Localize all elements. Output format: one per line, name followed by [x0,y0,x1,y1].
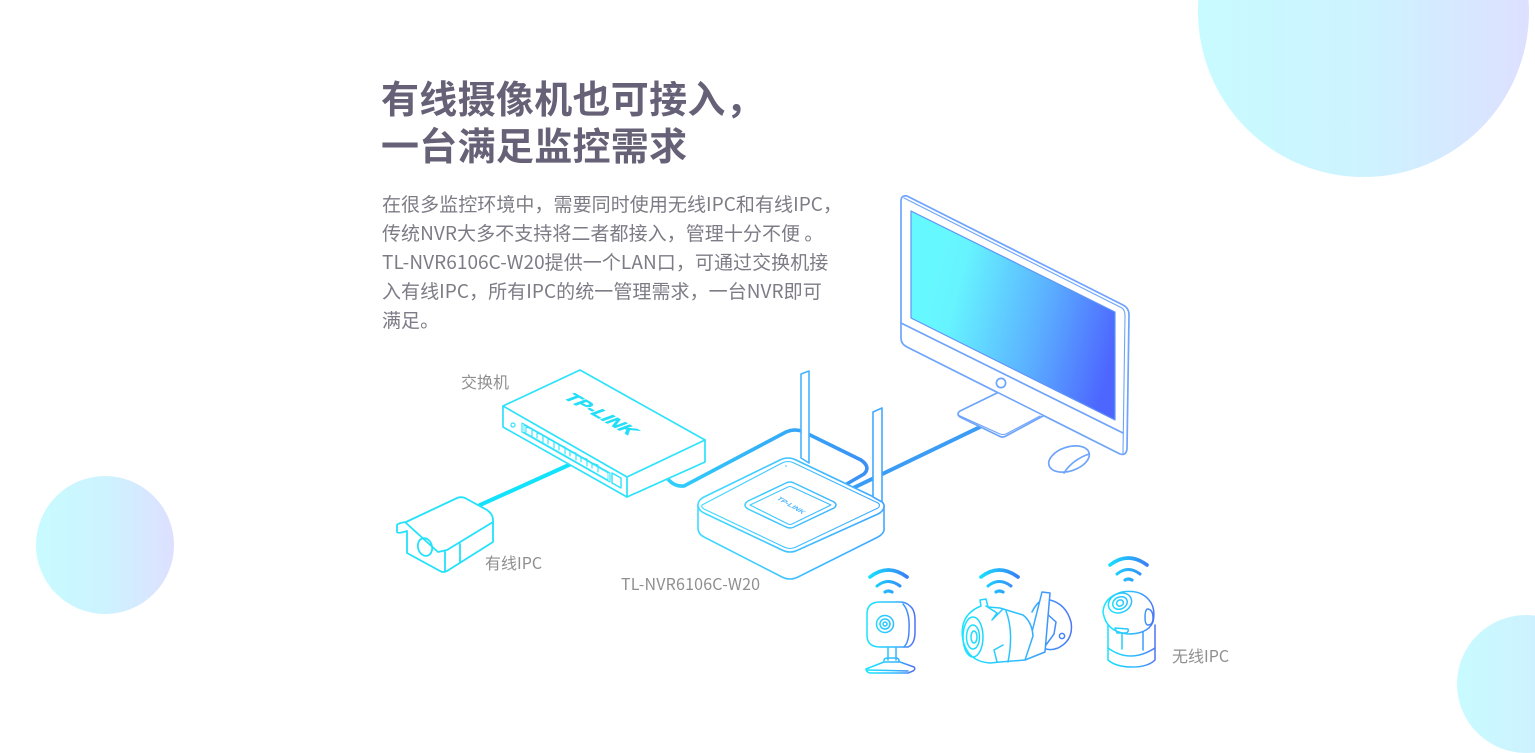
camera lens [416,536,434,558]
lens [876,616,894,632]
body text: 入有线IPC，所有IPC的统一管理需求，一台NVR即可 [382,277,822,304]
NVR logo: TP-LINK [774,497,806,515]
icon: indoor camera [866,602,915,673]
body text: TL-NVR6106C-W20提供一个LAN口，可通过交换机接 [382,248,828,275]
NVR antenna front [873,408,882,502]
switch logo: TP-LINK [560,391,644,439]
NVR inner panel [745,482,836,528]
title [381,69,764,171]
NVR antenna rear [801,371,809,463]
icon: bullet camera [962,592,1071,663]
body text: 传统NVR大多不支持将二者都接入，管理十分不便 。 [382,219,823,246]
label: switch: 交换机 [461,369,509,393]
icon: NVR [698,371,884,579]
background circle: bottom right [1457,615,1535,753]
background circle: top right [1198,0,1529,177]
monitor button [996,378,1006,388]
body text [382,190,842,333]
icon: monitor [901,196,1129,477]
label: NVR model: TL-NVR6106C-W20 [621,571,760,595]
icon: wifi signal 3 [1110,558,1147,580]
background circle: left [36,476,174,614]
cable: switch to NVR [667,430,867,486]
switch ports [522,423,621,488]
stand [884,648,899,663]
label: wired IPC: 有线IPC [485,550,542,574]
body [962,599,1033,663]
body text: 在很多监控环境中，需要同时使用无线IPC和有线IPC， [382,190,842,217]
label: wireless IPC: 无线IPC [1172,643,1229,667]
lens [1105,589,1135,617]
cable: camera to switch [480,464,571,505]
icon: switch [503,370,705,497]
icon: dome camera [1103,589,1155,667]
lens [963,617,983,657]
title: 一台满足监控需求 [381,116,687,171]
switch LED [511,423,515,427]
icon: wifi signal 2 [981,570,1018,592]
monitor screen [911,211,1115,420]
cable: monitor to NVR [847,427,980,491]
icon: wired camera [397,497,493,572]
icon: wifi signal 1 [870,570,907,592]
title: 有线摄像机也可接入， [381,69,764,124]
monitor stand [958,393,1043,437]
wall mount [1032,599,1071,650]
mouse [1045,441,1093,477]
body text: 满足。 [382,306,439,333]
